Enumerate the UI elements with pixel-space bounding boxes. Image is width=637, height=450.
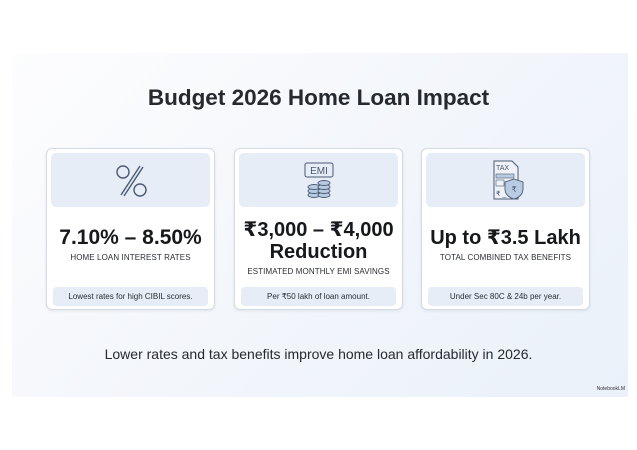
note: Under Sec 80C & 24b per year.	[450, 292, 561, 301]
card: tax benefits	[421, 148, 590, 310]
note: Per ₹50 lakh of loan amount.	[267, 292, 370, 301]
value: Reduction	[270, 241, 367, 263]
note	[241, 287, 396, 306]
icon: tax document shield: ₹ _	[496, 190, 506, 198]
icon: EMI coins	[239, 153, 398, 207]
value: 7.10% – 8.50%	[59, 226, 202, 249]
slide background	[12, 53, 628, 397]
watermark: NotebookLM	[597, 386, 625, 392]
note	[428, 287, 583, 306]
value: ₹3,000 – ₹4,000	[243, 219, 394, 241]
icon: EMI coins: EMI	[310, 166, 328, 177]
label: HOME LOAN INTEREST RATES	[70, 253, 191, 262]
label: ESTIMATED MONTHLY EMI SAVINGS	[247, 267, 390, 276]
icon: tax document shield: TAX	[496, 165, 509, 172]
footer statement: Lower rates and tax benefits improve home loan affordability in 2026.	[105, 346, 532, 362]
note: Lowest rates for high CIBIL scores.	[68, 292, 193, 301]
note	[53, 287, 208, 306]
label: TOTAL COMBINED TAX BENEFITS	[440, 253, 571, 262]
icon: percent	[51, 153, 210, 207]
title: Budget 2026 Home Loan Impact	[148, 85, 489, 110]
value: Up to ₹3.5 Lakh	[430, 227, 581, 249]
icon: tax document shield: ₹	[511, 185, 517, 194]
card: interest rates	[46, 148, 215, 310]
icon: tax document shield	[426, 153, 585, 207]
card: EMI savings	[234, 148, 403, 310]
value	[243, 219, 394, 263]
